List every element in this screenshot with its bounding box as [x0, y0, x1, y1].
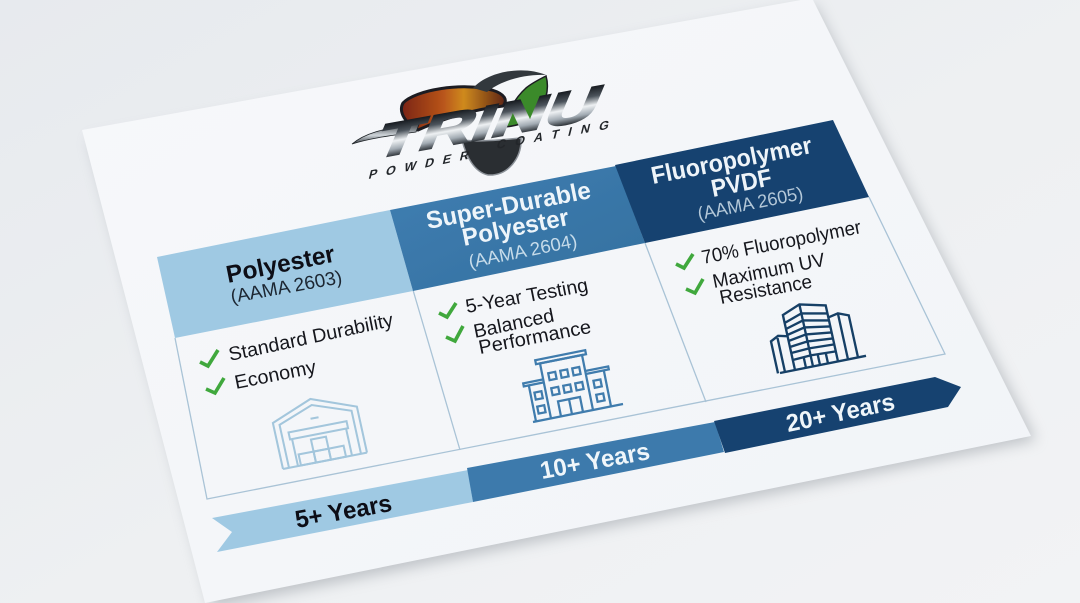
icon: check [200, 350, 218, 366]
logo emblem: dark leaf [462, 138, 521, 175]
logo tagline: powder: POWDER [367, 147, 471, 182]
header: polyester [157, 210, 413, 338]
panel: fluoropolymer PVDF [615, 120, 869, 373]
table outline and column dividers [175, 197, 945, 499]
feature: economy: Economy [233, 356, 318, 394]
icon: check [686, 279, 703, 293]
logo tagline: coating: COATING [495, 117, 611, 152]
timeline segment: 5+ years [212, 470, 473, 552]
panel: super-durable polyester: Performance [477, 316, 593, 359]
heading: polyester: Polyester [224, 241, 338, 289]
logo emblem: green leaf [505, 76, 547, 127]
panel: super-durable polyester [390, 166, 645, 422]
timeline segment: 20+ years [714, 377, 961, 453]
heading: fluoropolymer PVDF: Fluoropolymer [649, 132, 815, 190]
logo: Trinu Powder Coating [352, 70, 612, 182]
feature: maximum UV resistance: Maximum UV [711, 249, 827, 293]
panel: fluoropolymer PVDF: Resistance [718, 271, 814, 309]
standard: AAMA 2604: (AAMA 2604) [467, 230, 579, 272]
comparison table [157, 120, 945, 499]
label: 20+ years: 20+ Years [784, 389, 897, 438]
logo emblem: orange leaf [401, 87, 505, 130]
icon: check [439, 303, 456, 317]
feature: 5-year testing: 5-Year Testing [464, 274, 590, 318]
label: 5+ years: 5+ Years [293, 490, 394, 534]
panel: super-durable polyester: Polyester [460, 204, 572, 252]
standard: AAMA 2603: (AAMA 2603) [229, 266, 344, 307]
label: 10+ years: 10+ Years [538, 438, 652, 485]
feature: balanced performance: Balanced [472, 305, 556, 343]
logo emblem: beak [473, 70, 546, 92]
timeline arrow [212, 377, 961, 552]
heading: super-durable polyester: Super-Durable [424, 177, 593, 235]
logo wordmark: TRINU [366, 74, 612, 170]
feature: 70% fluoropolymer: 70% Fluoropolymer [700, 216, 863, 269]
header: fluoropolymer [615, 120, 869, 243]
icon: check [676, 254, 693, 268]
icon: skyscrapers [764, 294, 866, 373]
icon: check [206, 378, 224, 393]
icon: warehouse [269, 391, 367, 469]
panel: polyester [157, 210, 413, 469]
standard: AAMA 2605: (AAMA 2605) [696, 182, 805, 224]
icon: check [446, 326, 463, 341]
feature: standard durability: Standard Durability [227, 309, 395, 366]
panel: fluoropolymer PVDF: PVDF [709, 164, 774, 203]
header: super-durable [390, 166, 645, 291]
icon: office building [519, 345, 623, 422]
timeline segment: 10+ years [467, 422, 724, 502]
logo swoosh on T [352, 122, 420, 144]
